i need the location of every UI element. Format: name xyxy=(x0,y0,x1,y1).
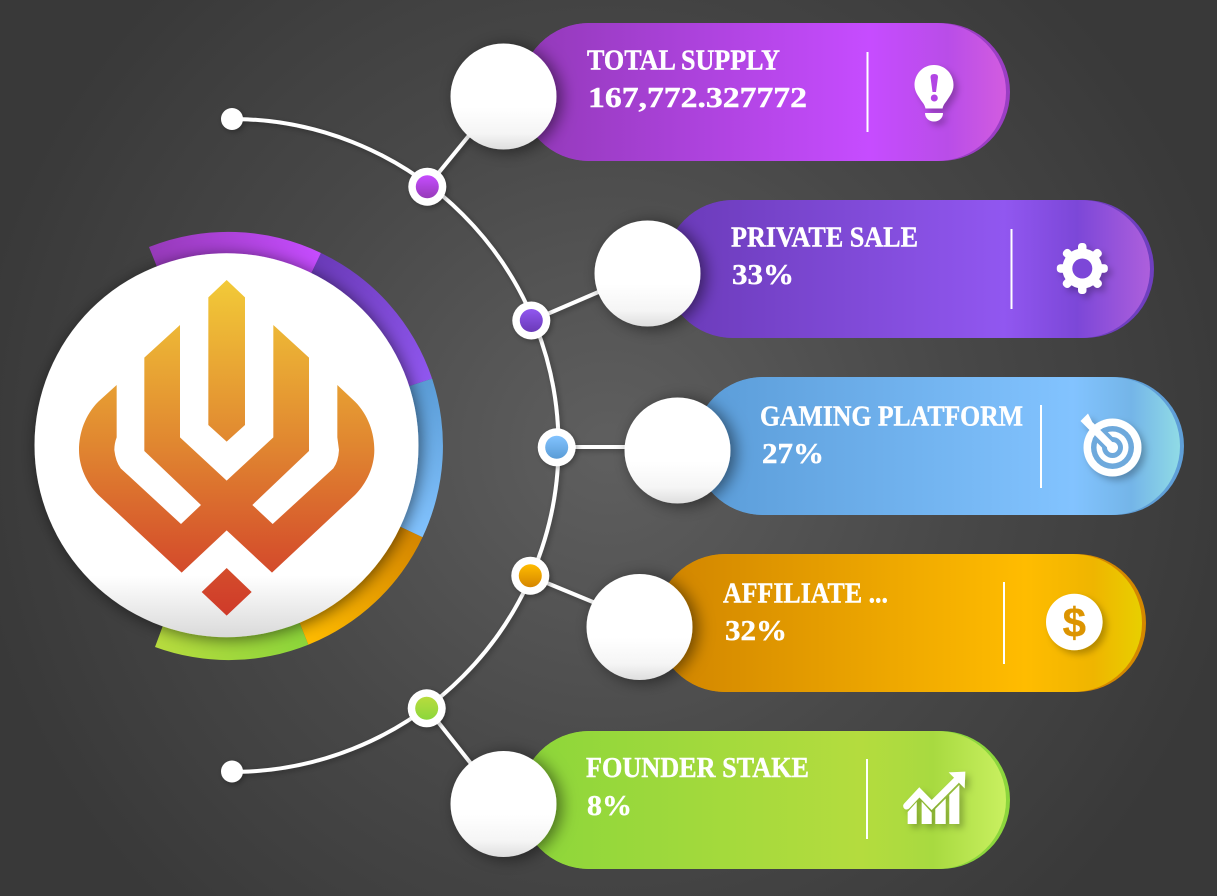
panel: affiliate xyxy=(586,554,1146,692)
logo mark xyxy=(79,280,374,616)
node: green xyxy=(408,689,446,727)
panel: private sale xyxy=(594,200,1154,338)
panel: gaming platform xyxy=(624,377,1184,515)
panel: total supply: TOTAL SUPPLY xyxy=(587,44,780,76)
icon: growth chart xyxy=(907,772,965,824)
logo disc xyxy=(34,253,418,637)
panel: affiliate: AFFILIATE ... xyxy=(723,578,888,610)
timeline curve xyxy=(221,108,558,782)
icon: dollar: $ xyxy=(1063,599,1086,646)
panel: total supply: 167,772.327772 xyxy=(588,82,807,114)
node: purple xyxy=(408,168,446,206)
panel: private sale: 33% xyxy=(732,259,794,291)
panel: gaming platform: GAMING PLATFORM xyxy=(760,400,1023,432)
panel: founder stake xyxy=(450,731,1010,869)
icon: dollar xyxy=(1046,594,1103,650)
donut ring xyxy=(149,232,443,660)
panel: total supply xyxy=(450,23,1010,161)
panel: gaming platform: 27% xyxy=(762,438,824,470)
node: blue xyxy=(538,428,576,466)
icon: gear xyxy=(1057,243,1108,294)
panel: founder stake: FOUNDER STAKE xyxy=(586,752,809,784)
panel: founder stake: 8% xyxy=(587,790,632,822)
panel: private sale: PRIVATE SALE xyxy=(731,222,918,254)
connector lines xyxy=(427,122,640,775)
node: orange xyxy=(511,557,549,595)
node: violet xyxy=(512,302,550,340)
icon: target xyxy=(1080,414,1142,476)
panel: affiliate: 32% xyxy=(725,615,787,647)
icon: light bulb xyxy=(914,65,954,122)
